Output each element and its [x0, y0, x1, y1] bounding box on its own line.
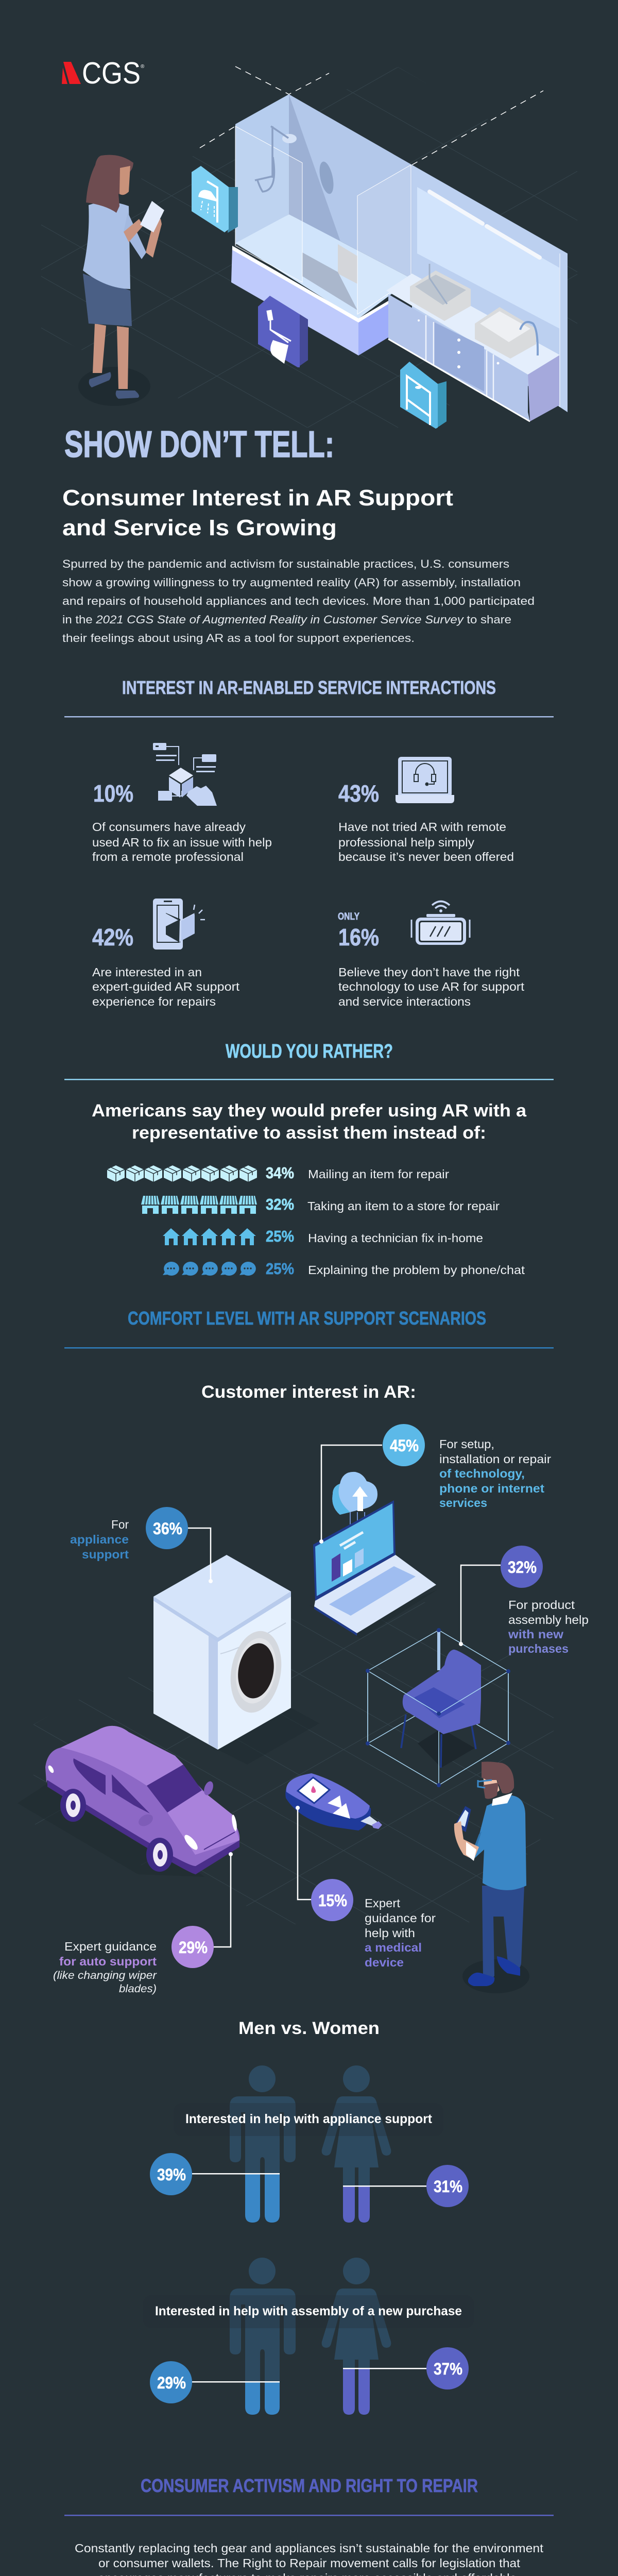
callout text: Expert guidance [64, 1940, 157, 1953]
right to repair paragraph: or consumer wallets. The Right to Repair movement calls for legislation that [98, 2556, 521, 2570]
subtitle: Consumer Interest in AR Support [62, 485, 453, 511]
callout: 32% new purchases: 32% [508, 1558, 537, 1577]
callout text [365, 1896, 436, 1969]
logo: CGS: ® [141, 64, 145, 70]
illustration: chair in AR cube [366, 1628, 510, 1787]
pictogram: man 39% [150, 2065, 296, 2223]
description: used AR to fix an issue with help [92, 836, 272, 849]
callout: 36% appliance [70, 1507, 213, 1583]
pictogram: woman 31% [322, 2065, 469, 2223]
callout text: purchases [508, 1642, 569, 1655]
subtitle [62, 485, 453, 540]
callout text [508, 1598, 589, 1655]
callout text: a medical [365, 1941, 422, 1954]
callout: 15% medical device [296, 1806, 436, 1969]
callout: 29% auto support: 29% [179, 1938, 208, 1957]
callout text: for auto support [59, 1955, 157, 1968]
row: technician in-home 25%: 25% [266, 1227, 294, 1245]
callout: 15% medical device: 15% [318, 1891, 347, 1910]
section heading: consumer activism: CONSUMER ACTIVISM AND RIGHT TO REPAIR [141, 2475, 478, 2496]
right to repair paragraph [75, 2541, 544, 2576]
subheading: Americans prefer: Americans say they would prefer using AR with a [92, 1101, 527, 1121]
illustration: woman with tablet [78, 155, 164, 406]
stat: 43%: 43% [338, 780, 379, 807]
callout text: (like changing wiper [53, 1970, 157, 1981]
row: phone or chat 25%: 25% [266, 1260, 294, 1278]
icon: cloud upload [332, 1472, 377, 1533]
callout: 45% technology: 45% [390, 1436, 419, 1455]
icon: shower tile [192, 166, 238, 233]
stat: 10%: 10% [93, 780, 133, 807]
callout text: blades) [119, 1983, 157, 1995]
caption [143, 2295, 474, 2328]
pictogram: man 39%: 39% [157, 2165, 186, 2184]
right to repair paragraph: Constantly replacing tech gear and appliances isn’t sustainable for the environment [75, 2541, 544, 2555]
callout text [53, 1940, 157, 1995]
row: mailing an item 34% [107, 1164, 449, 1182]
callout text: services [439, 1496, 487, 1510]
description [92, 820, 272, 863]
section heading: comfort level: COMFORT LEVEL WITH AR SUPPORT SCENARIOS [128, 1308, 486, 1329]
intro paragraph: their feelings about using AR as a tool for support experiences. [62, 632, 415, 645]
caption: Interested in help with appliance support [185, 2112, 433, 2126]
row: technician in-home 25% [163, 1227, 483, 1245]
logo: CGS: CGS [82, 56, 141, 90]
stat: 42% [92, 899, 240, 1008]
subheading: men vs women: Men vs. Women [238, 2019, 380, 2038]
row: phone or chat 25% [163, 1260, 525, 1278]
description: experience for repairs [92, 995, 216, 1008]
description: Have not tried AR with remote [338, 820, 506, 834]
row: mailing an item 34%: Mailing an item for repair [308, 1167, 449, 1181]
illustration: purple car [18, 1726, 239, 1877]
icon: AR headset with wifi [411, 902, 470, 945]
description: because it’s never been offered [338, 850, 514, 863]
caption [174, 2103, 443, 2136]
description [92, 965, 240, 1008]
description: technology to use AR for support [338, 980, 525, 993]
row: technician in-home 25%: Having a technician fix in-home [308, 1231, 483, 1245]
intro paragraph: in the 2021 CGS State of Augmented Reality in Customer Service Survey to share [62, 613, 511, 626]
callout text [439, 1437, 551, 1510]
pictogram: man 29% [150, 2258, 296, 2415]
callout text [70, 1518, 129, 1561]
icon: cabinet tile [400, 362, 447, 429]
callout: 36% appliance: 36% [153, 1519, 182, 1538]
intro paragraph: and repairs of household appliances and tech devices. More than 1,000 participated [62, 595, 535, 607]
stat: 43% [338, 757, 514, 863]
callout text: For [111, 1518, 129, 1531]
callout text: For product [508, 1598, 575, 1612]
illustration: man with tablet [454, 1761, 529, 1993]
illustration: washing machine [153, 1555, 319, 1765]
row: taking to store 32%: Taking an item to a store for repair [307, 1199, 500, 1213]
section heading: would you rather: WOULD YOU RATHER? [226, 1041, 393, 1062]
subheading: Americans prefer: representative to assist them instead of: [132, 1123, 486, 1143]
description: Believe they don’t have the right [338, 965, 520, 979]
intro paragraph: Spurred by the pandemic and activism for sustainable practices, U.S. consumers [62, 557, 509, 570]
icon: phone with AR cube [153, 899, 205, 950]
pictogram: woman 37%: 37% [434, 2360, 462, 2378]
callout: 29% auto support [53, 1852, 233, 1995]
chart: appliance support by gender [150, 2065, 469, 2223]
callout text: For setup, [439, 1437, 494, 1451]
callout text: of technology, [439, 1467, 525, 1480]
description: Of consumers have already [92, 820, 246, 834]
callout: 32% new purchases [459, 1546, 589, 1655]
row: taking to store 32% [141, 1195, 500, 1214]
description: Are interested in an [92, 965, 202, 979]
stat: only 16%: ONLY [338, 911, 359, 922]
description: professional help simply [338, 836, 475, 849]
callout text: installation or repair [439, 1452, 551, 1466]
stat: 10% [92, 743, 272, 863]
description: and service interactions [338, 995, 471, 1008]
callout text: with new [508, 1628, 563, 1641]
callout text: support [82, 1548, 129, 1561]
intro paragraph: show a growing willingness to try augmented reality (AR) for assembly, installation [62, 576, 521, 589]
row: phone or chat 25%: Explaining the problem by phone/chat [308, 1263, 525, 1277]
illustration: isometric bathroom [200, 66, 568, 421]
pictogram: woman 37% [322, 2258, 469, 2415]
illustration: laptop [309, 1500, 438, 1638]
callout text: assembly help [508, 1613, 589, 1626]
callout text: phone or internet [439, 1482, 544, 1495]
icon: toilet tile [258, 296, 308, 367]
description: expert-guided AR support [92, 980, 240, 993]
icon: laptop with headset [396, 757, 454, 803]
heading: Show Don't Tell: SHOW DON’T TELL: [64, 424, 334, 465]
stat: only 16% [338, 902, 525, 1008]
illustration: medical device [285, 1773, 382, 1831]
stat: 42%: 42% [92, 924, 133, 951]
pictogram: man 29%: 29% [157, 2374, 186, 2392]
subtitle: and Service Is Growing [62, 515, 337, 540]
section heading: interest in AR-enabled service interactions: INTEREST IN AR-ENABLED SERVICE INTERACTIONS [122, 677, 496, 698]
callout text: Expert [365, 1896, 401, 1910]
icon: cube and hand [153, 743, 217, 806]
callout: 45% technology [319, 1424, 551, 1544]
stat: only 16%: 16% [338, 924, 379, 951]
intro paragraph [62, 557, 535, 645]
pictogram: woman 31%: 31% [434, 2177, 462, 2196]
callout text: help with [365, 1926, 415, 1940]
row: mailing an item 34%: 34% [266, 1164, 294, 1182]
chart: assembly help by gender [143, 2258, 474, 2415]
subheading: customer interest: Customer interest in AR: [201, 1382, 416, 1402]
description [338, 965, 525, 1008]
description: from a remote professional [92, 850, 244, 863]
subheading: Americans prefer [92, 1101, 527, 1143]
callout text: guidance for [365, 1911, 436, 1925]
caption: Interested in help with assembly of a new purchase [155, 2304, 462, 2318]
description [338, 820, 514, 863]
callout text: device [365, 1956, 404, 1969]
row: taking to store 32%: 32% [266, 1195, 294, 1213]
callout text: appliance [70, 1533, 129, 1546]
